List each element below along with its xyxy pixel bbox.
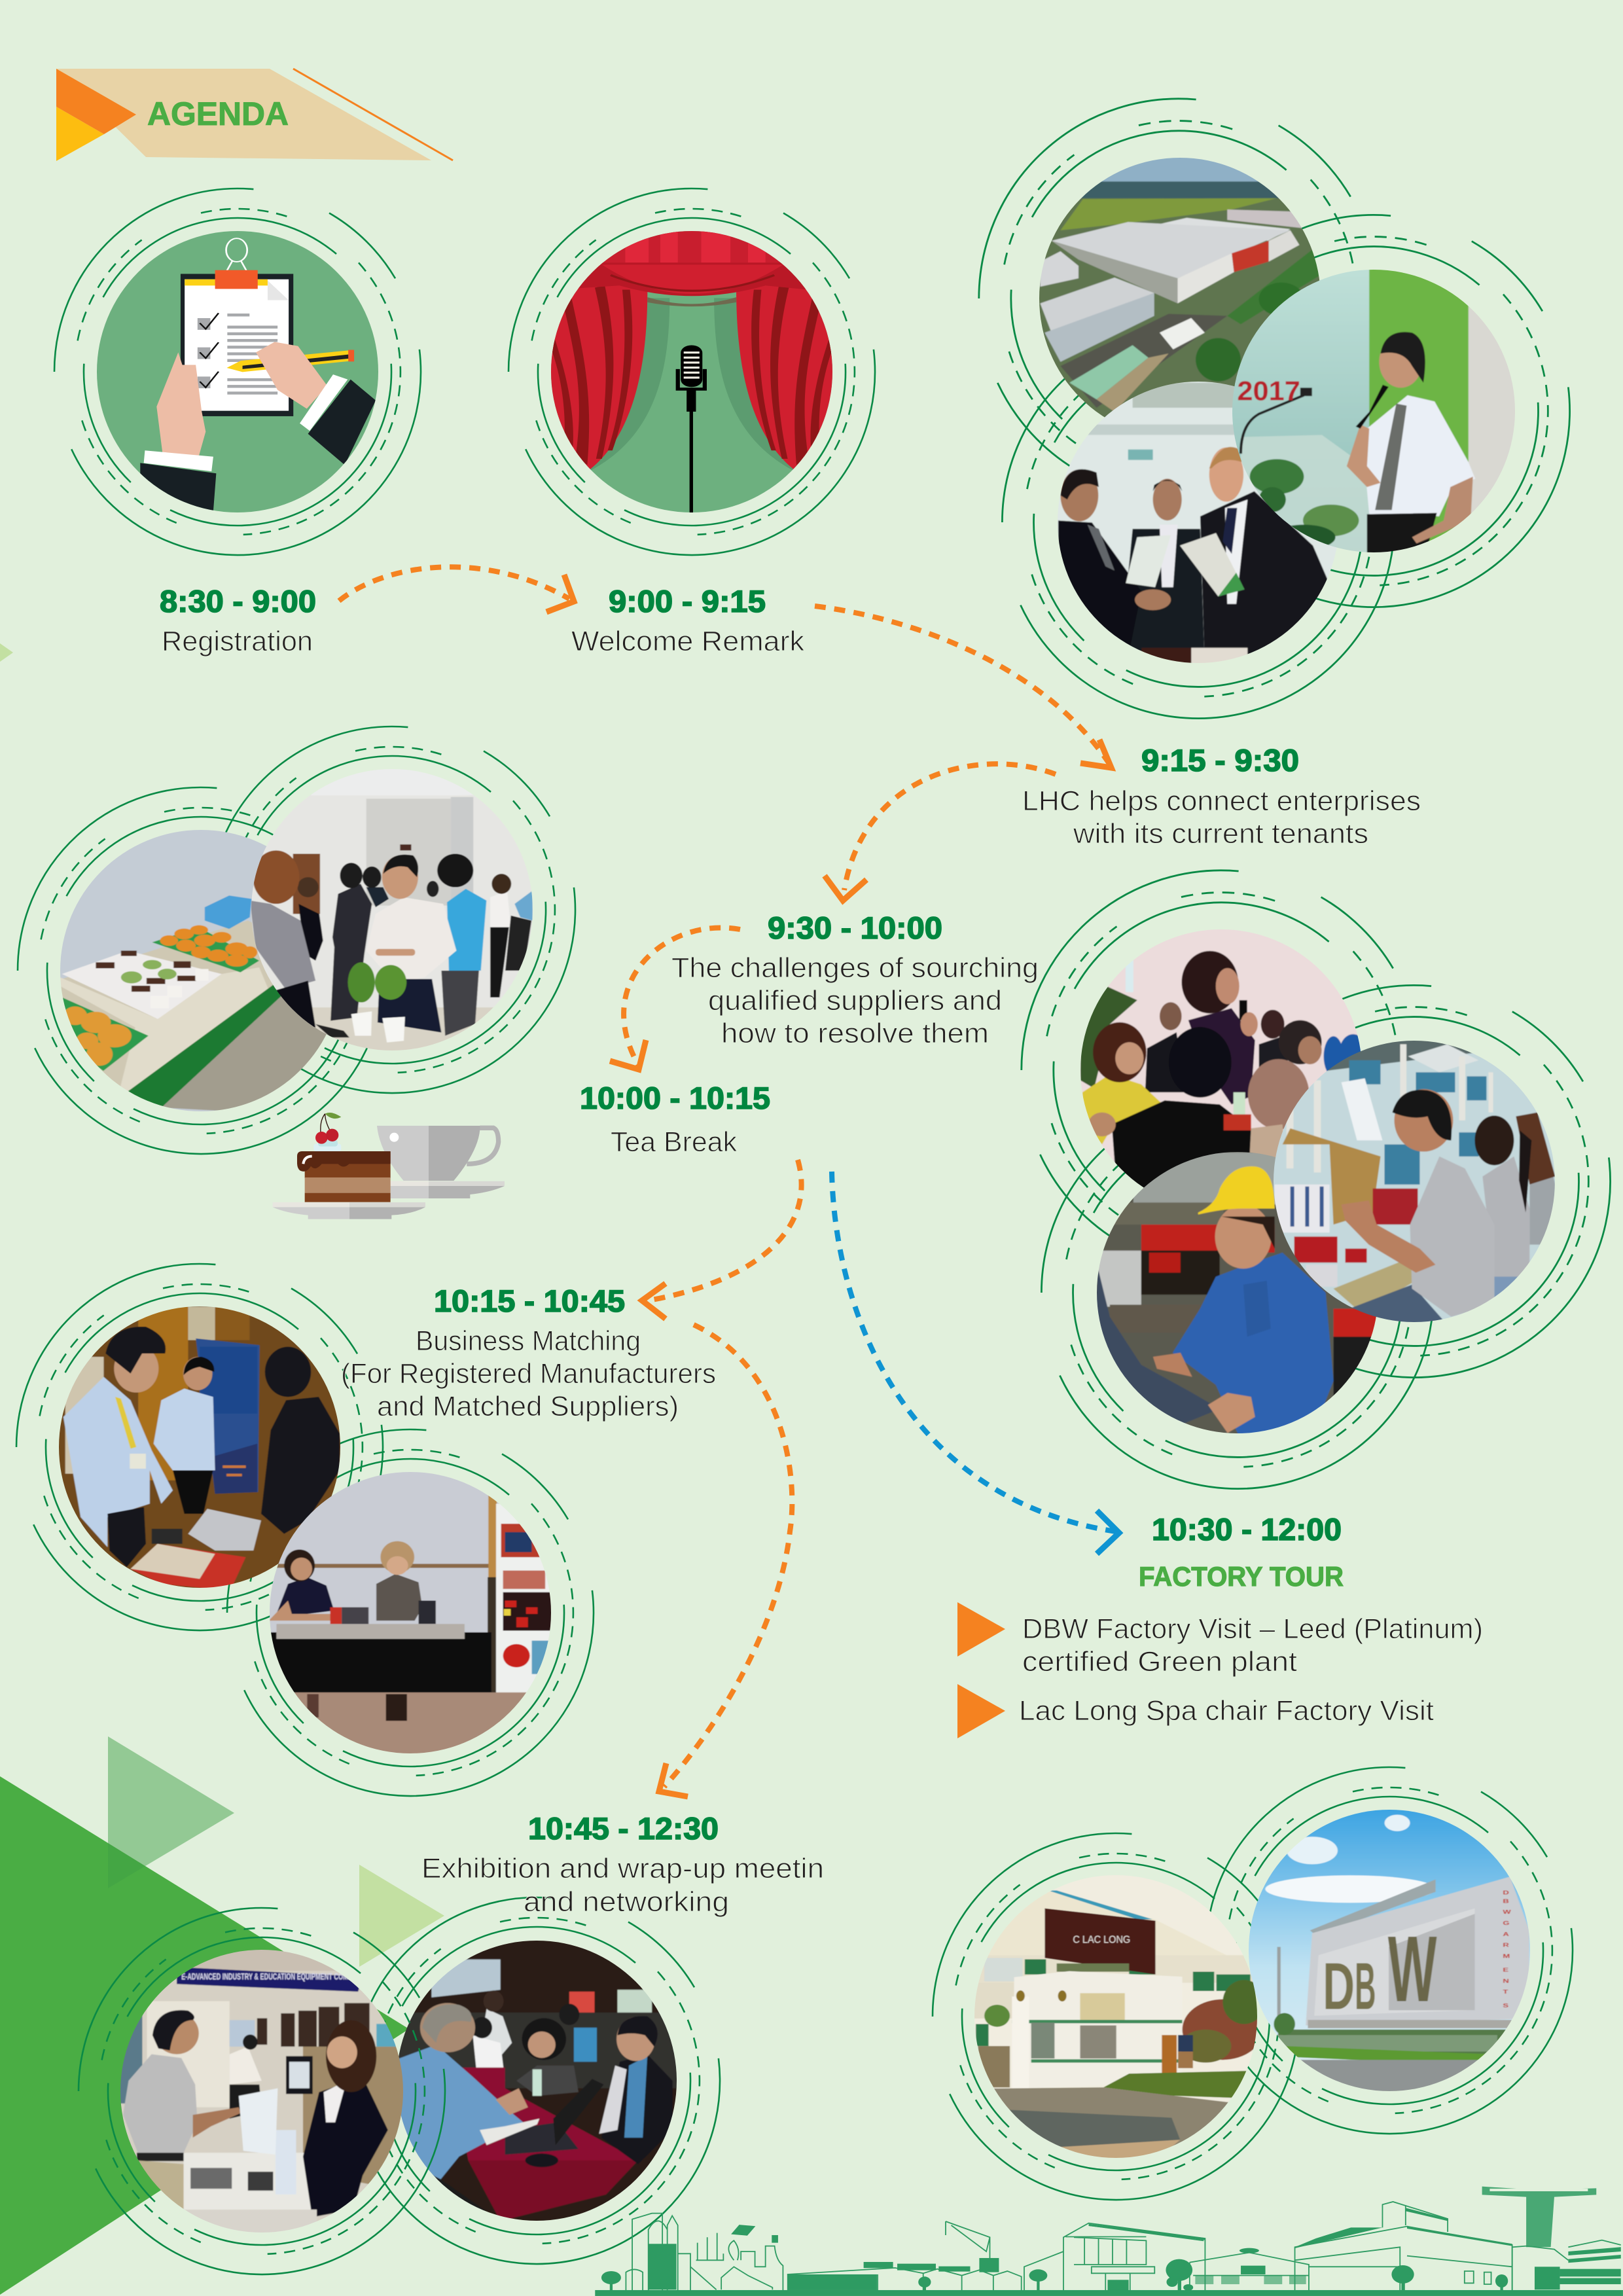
photo: exhibition booth conversation: E-ADVANCED INDUSTRY & EDUCATION EQUIPMENT COMPA [181, 1972, 356, 1982]
photo: Lac Long building: C LAC LONG [1073, 1933, 1130, 1945]
time and description: exhibition [421, 1811, 824, 1918]
photo: DBW factory building: R [1503, 1943, 1509, 1948]
photo: worker with helmet [1094, 1149, 1385, 1437]
photo: speaker at podium: 2017 [1237, 376, 1300, 406]
factory tour block: DBW Factory Visit – Leed (Platinum) [1022, 1613, 1483, 1645]
arrow: welcome to LHC [815, 606, 1111, 768]
time and description: challenges: qualified suppliers and [708, 985, 1002, 1016]
office block [1024, 2223, 1205, 2291]
time and description: challenges: 9:30 - 10:00 [768, 910, 942, 945]
photo: DBW factory building: D [1323, 1949, 1355, 2023]
time and description: exhibition: 10:45 - 12:30 [528, 1811, 719, 1846]
time and description: business matching [341, 1283, 716, 1422]
photo: DBW factory building: N [1503, 1978, 1509, 1984]
arrow: tea break to business matching [642, 1160, 802, 1319]
time and description: exhibition: Exhibition and wrap-up meetin [421, 1853, 824, 1884]
arrow: blue to factory tour [832, 1172, 1119, 1554]
icon: clipboard registration [97, 231, 378, 512]
trees [601, 2259, 1508, 2291]
time and description: LHC connect: 9:15 - 9:30 [1141, 743, 1299, 778]
photo: tea break guests [251, 769, 533, 1050]
photo: networking at red table [390, 1937, 684, 2229]
silo tanks [626, 2214, 783, 2291]
ring around exhibition photo [79, 1908, 445, 2274]
time and description: business matching: 10:15 - 10:45 [434, 1283, 625, 1318]
time and description: tea break: Tea Break [611, 1126, 737, 1158]
factory tour block [957, 1512, 1483, 1738]
photo: speaker at podium [1227, 266, 1522, 558]
ring around Lac Long photo [933, 1833, 1299, 2200]
time and description: business matching: (For Registered Manufacturers [341, 1358, 716, 1390]
photo: tea break food table [56, 827, 338, 1114]
factory tour block: 10:30 - 12:00 [1152, 1512, 1342, 1547]
large green triangles [0, 1736, 444, 2295]
time and description: registration: 8:30 - 9:00 [160, 584, 316, 619]
photo: DBW factory building: E [1503, 1967, 1508, 1973]
photo: exhibition booth with roll-up [54, 1303, 346, 1590]
photo: signing ceremony [1052, 378, 1344, 671]
photo: audience speaker [1080, 929, 1361, 1187]
time and description: challenges: The challenges of sourching [671, 952, 1039, 984]
agenda header [56, 69, 453, 161]
photo: exhibition booth conversation [115, 1945, 408, 2240]
photo: factory workers assembling [1271, 1036, 1561, 1329]
photo: registered manufacturers desk [265, 1471, 557, 1759]
factory tour block: certified Green plant [1022, 1646, 1297, 1677]
time and description: business matching: Business Matching [416, 1325, 641, 1357]
arrow: registration to welcome [339, 567, 574, 612]
photo: DBW factory building: W [1388, 1916, 1437, 2021]
factory tour block: FACTORY TOUR [1139, 1561, 1344, 1592]
arrow: challenges to tea break [610, 927, 740, 1069]
factory tour block: Lac Long Spa chair Factory Visit [1019, 1695, 1434, 1727]
photo: factory aerial view [1039, 158, 1319, 418]
photo: DBW factory building: A [1503, 1931, 1509, 1937]
time and description: registration [160, 584, 316, 657]
photo: DBW factory building: T [1503, 1989, 1508, 1995]
agenda header: AGENDA [147, 96, 289, 132]
photo: DBW factory building: D [1503, 1890, 1509, 1896]
time and description: challenges [671, 910, 1039, 1049]
workshop [1190, 2248, 1309, 2291]
icon: stage curtain and microphone [543, 229, 840, 515]
time and description: registration: Registration [162, 626, 313, 657]
photo: DBW factory building: W [1503, 1909, 1511, 1915]
time and description: tea break: 10:00 - 10:15 [580, 1081, 770, 1115]
warehouses and crane [787, 2221, 1022, 2291]
skyline: factories and buildings [595, 2187, 1623, 2296]
photo: DBW factory building: G [1503, 1920, 1510, 1926]
icon: cake and coffee cup [273, 1113, 505, 1219]
time and description: LHC connect: with its current tenants [1073, 818, 1368, 850]
time and description: tea break [580, 1081, 770, 1158]
photo: DBW factory building: B [1503, 1898, 1509, 1905]
decorative left edge triangle [0, 643, 13, 662]
photo: DBW factory building [1244, 1808, 1538, 2098]
photo: DBW factory building: S [1503, 2003, 1508, 2009]
time and description: exhibition: and networking [524, 1886, 729, 1918]
large factory with tower [1295, 2187, 1621, 2291]
arrow: business matching to exhibition [659, 1325, 792, 1797]
photo: DBW factory building: M [1503, 1954, 1510, 1960]
ground band [595, 2290, 1623, 2296]
photo: Lac Long building [967, 1873, 1265, 2167]
time and description: welcome remark [571, 584, 805, 657]
arrow: LHC to challenges [825, 764, 1056, 901]
time and description: LHC connect [1022, 743, 1421, 850]
time and description: LHC connect: LHC helps connect enterprises [1022, 785, 1421, 817]
time and description: challenges: how to resolve them [721, 1018, 989, 1049]
time and description: business matching: and Matched Suppliers) [377, 1391, 679, 1422]
time and description: welcome remark: Welcome Remark [571, 626, 805, 657]
time and description: welcome remark: 9:00 - 9:15 [609, 584, 766, 619]
photo: DBW factory building: B [1355, 1949, 1376, 2023]
